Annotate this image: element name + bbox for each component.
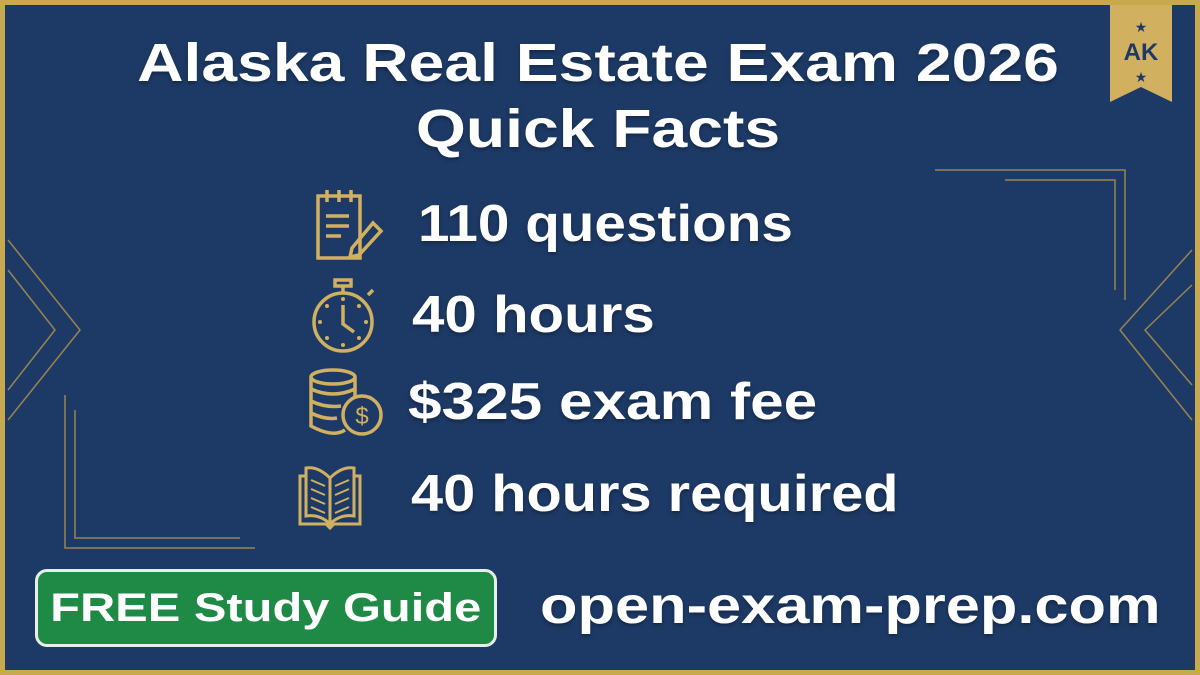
fact 1 [316,190,793,260]
url: open-exam-prep.com [540,577,1161,635]
fact 1: 110 questions [418,195,793,253]
badge: AK ribbon: AK [1124,39,1159,66]
icon: coins: $ [355,403,369,430]
title: Quick Facts [416,99,780,159]
icon: notepad [316,190,384,260]
badge: AK ribbon: ★ [1135,69,1147,85]
fact 3 [309,368,817,436]
badge: AK ribbon [1110,5,1172,102]
title [137,33,1059,161]
badge: AK ribbon: ★ [1135,19,1147,35]
icon: open book [298,466,362,530]
button: FREE Study Guide: FREE Study Guide [50,586,482,630]
fact 3: $325 exam fee [408,373,817,431]
fact 2: 40 hours [412,286,655,344]
title: Alaska Real Estate Exam 2026 [137,33,1059,93]
button: FREE Study Guide [35,569,497,647]
icon: stopwatch [312,278,374,353]
icon: coins [309,368,383,436]
fact 4: 40 hours required [411,465,899,523]
fact 2 [312,278,655,353]
